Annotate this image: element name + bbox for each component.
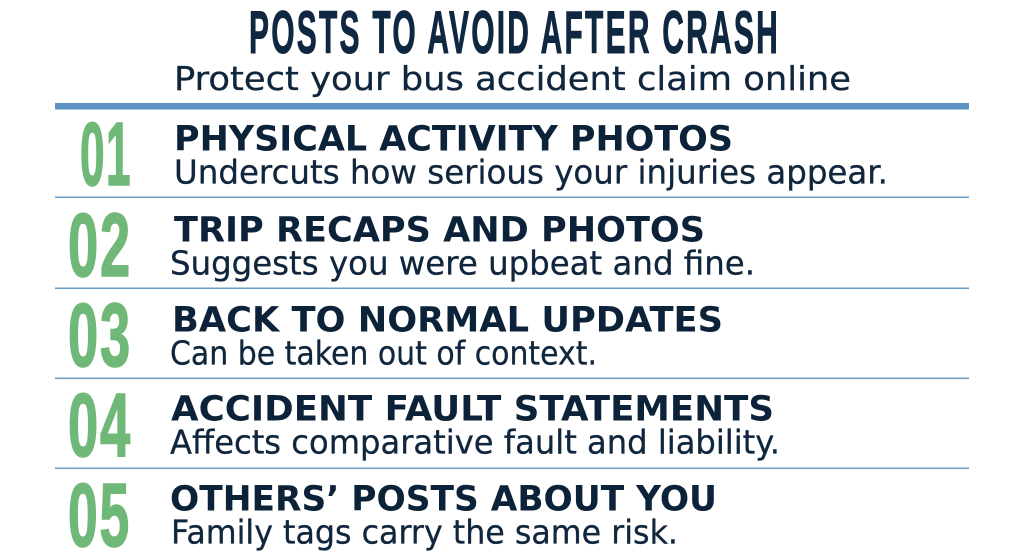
- item 01: [80, 105, 888, 205]
- item 01: Undercuts how serious your injuries appear.: [174, 154, 888, 192]
- item 04: Affects comparative fault and liability.: [170, 424, 780, 462]
- item 03: [68, 286, 723, 386]
- item 05: Family tags carry the same risk.: [171, 514, 678, 552]
- item 03: Can be taken out of context.: [170, 334, 597, 372]
- item 05: OTHERS’ POSTS ABOUT YOU: [170, 480, 717, 520]
- item 02: 02: [68, 196, 132, 296]
- subtitle: Protect your bus accident claim online: [174, 60, 851, 98]
- item 02: Suggests you were upbeat and fine.: [170, 244, 755, 282]
- item 02: [68, 196, 755, 296]
- item 03: 03: [68, 286, 132, 386]
- item 02: TRIP RECAPS AND PHOTOS: [174, 210, 705, 250]
- item 01: PHYSICAL ACTIVITY PHOTOS: [174, 120, 733, 160]
- item 01: 01: [80, 105, 132, 205]
- item 03: BACK TO NORMAL UPDATES: [172, 300, 723, 340]
- item 04: ACCIDENT FAULT STATEMENTS: [171, 390, 774, 430]
- item 04: 04: [68, 376, 132, 476]
- item 04: [68, 376, 780, 476]
- item 05: [68, 466, 717, 559]
